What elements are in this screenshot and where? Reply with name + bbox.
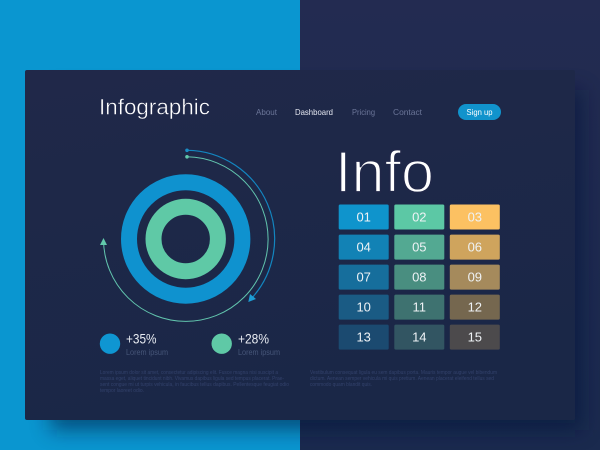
number grid: 03 (468, 210, 482, 224)
navigation: Pricing (352, 107, 375, 117)
legend: blue stat: Lorem ipsum (126, 347, 168, 357)
legend: green stat (212, 332, 280, 357)
number grid: 10 (356, 300, 371, 314)
number grid: 06 (468, 240, 482, 254)
number grid: 12 (468, 300, 482, 314)
title: Infographic (99, 94, 210, 120)
number grid: 04 (356, 240, 371, 254)
legend: green stat: +28% (238, 332, 269, 346)
text block: left paragraph: tempor laoreet odio. (100, 388, 144, 394)
number grid: 05 (412, 240, 427, 254)
number grid: 08 (412, 270, 427, 284)
card shadow (50, 90, 582, 430)
legend: blue stat (100, 332, 168, 357)
background: blue left panel (0, 0, 300, 450)
text block: left paragraph (100, 370, 289, 394)
number grid (339, 204, 500, 350)
navigation: Dashboard (295, 107, 333, 117)
text block: right paragraph: dictum. Aenean semper vehicula mi quis pretium. Aenean placerat eleifend tellus sed (310, 376, 494, 382)
text block: right paragraph: commodo quam blandit quis. (310, 382, 372, 388)
legend: green stat: Lorem ipsum (238, 347, 280, 357)
number grid: 02 (412, 210, 427, 224)
text block: left paragraph: sent congue mi ut turpis vehicula, in faucibus tellus dapibus. Pellentesque feugiat odio (100, 382, 289, 388)
donut chart (129, 182, 242, 296)
sign up button (458, 104, 501, 120)
number grid: 14 (412, 330, 427, 344)
heading: Info: Info (335, 140, 434, 205)
number grid: 07 (356, 270, 371, 284)
navigation (256, 107, 423, 117)
number grid: 15 (468, 330, 482, 344)
number grid: 13 (356, 330, 371, 344)
number grid: 01 (356, 210, 371, 224)
number grid: 11 (413, 300, 426, 314)
navigation: About (256, 107, 278, 117)
arrow: blue arc (185, 148, 275, 302)
background: navy right panel (300, 0, 600, 450)
sign up button: Sign up (466, 107, 493, 117)
inner green ring (154, 207, 218, 271)
text block: right paragraph (310, 370, 497, 388)
outer blue ring (129, 182, 242, 296)
text block: right paragraph: Vestibulum consequat ligula eu sem dapibus porta. Mauris tempor augue vel bibendum (310, 370, 497, 376)
text block: left paragraph: massa eget, aliquet tincidunt nibh. Vivamus dapibus ligula sed tempus placerat. Prae- (100, 376, 284, 382)
number grid: 09 (468, 270, 482, 284)
legend: blue stat: +35% (126, 332, 156, 346)
panel: main card (25, 70, 575, 420)
arrow: teal arc (100, 155, 268, 321)
navigation: Contact (393, 107, 423, 117)
text block: left paragraph: Lorem ipsum dolor sit amet, consectetur adipiscing elit. Fusce magna nisi suscipit a (100, 370, 278, 376)
